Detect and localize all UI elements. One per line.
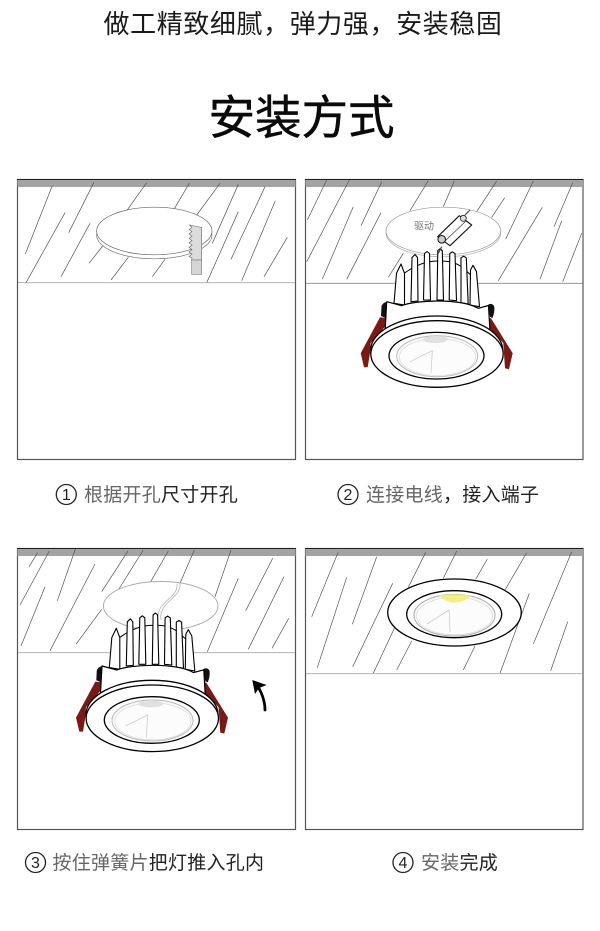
caption 1: 根据开孔尺寸开孔	[84, 484, 238, 506]
caption 2: 2	[344, 487, 353, 504]
icon: saw	[189, 225, 202, 274]
driver label: 驱动	[414, 220, 434, 232]
panel: step 2 connect wires	[305, 180, 584, 460]
installed lamp	[388, 579, 521, 646]
downlight	[361, 249, 513, 387]
hole disc with crack	[103, 582, 218, 630]
title: 安装方式	[208, 92, 394, 144]
icon: driver box and wire	[438, 210, 472, 253]
caption 4: 安装完成	[421, 852, 498, 874]
caption 2: 连接电线，接入端子	[366, 484, 539, 506]
panel: step 3 push lamp	[17, 548, 296, 830]
caption 3: 3	[31, 855, 40, 872]
panel: step 1 cut hole	[17, 180, 296, 460]
hole disc	[386, 207, 501, 257]
arrow: push up	[252, 680, 267, 710]
downlight	[76, 613, 228, 752]
caption 4: 4	[399, 855, 408, 872]
caption 1: 1	[62, 487, 71, 504]
hole disc	[97, 207, 212, 259]
panel: step 4 finished	[305, 548, 584, 830]
caption 3: 按住弹簧片把灯推入孔内	[52, 852, 264, 874]
subtitle: 做工精致细腻，弹力强，安装稳固	[104, 9, 503, 39]
